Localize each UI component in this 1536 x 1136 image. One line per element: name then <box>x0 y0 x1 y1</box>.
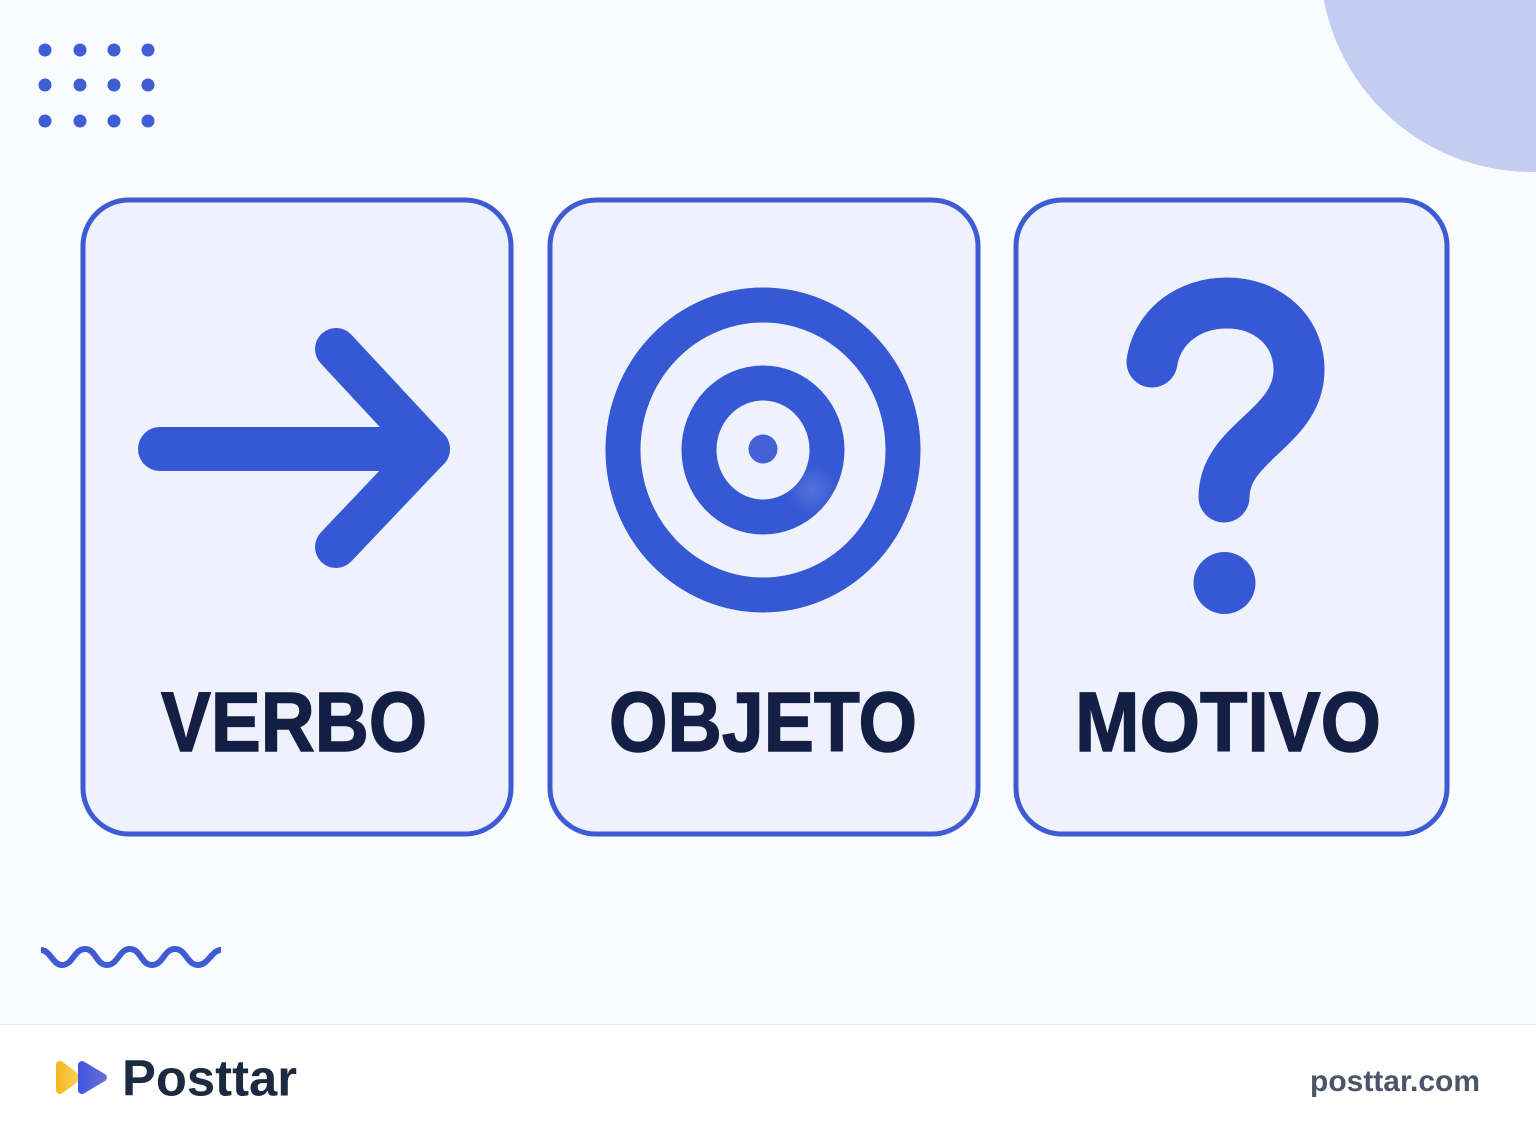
panel: objeto <box>550 200 978 834</box>
icon: logo <box>60 1065 103 1090</box>
website: posttar.com <box>1310 1065 1480 1098</box>
icon: target <box>623 305 903 595</box>
icon: arrow <box>160 349 429 547</box>
label: objeto: OBJETO <box>609 675 917 769</box>
decorative wave <box>41 949 221 965</box>
label: motivo: MOTIVO <box>1075 675 1381 769</box>
brand name: Posttar <box>122 1050 297 1106</box>
icon: question mark <box>1152 303 1299 614</box>
panel: motivo <box>1016 200 1447 834</box>
dot grid <box>38 44 154 128</box>
label: verbo: VERBO <box>161 675 427 769</box>
panel: verbo <box>83 200 511 834</box>
decorative corner circle <box>1320 0 1536 172</box>
footer <box>0 1024 1536 1136</box>
